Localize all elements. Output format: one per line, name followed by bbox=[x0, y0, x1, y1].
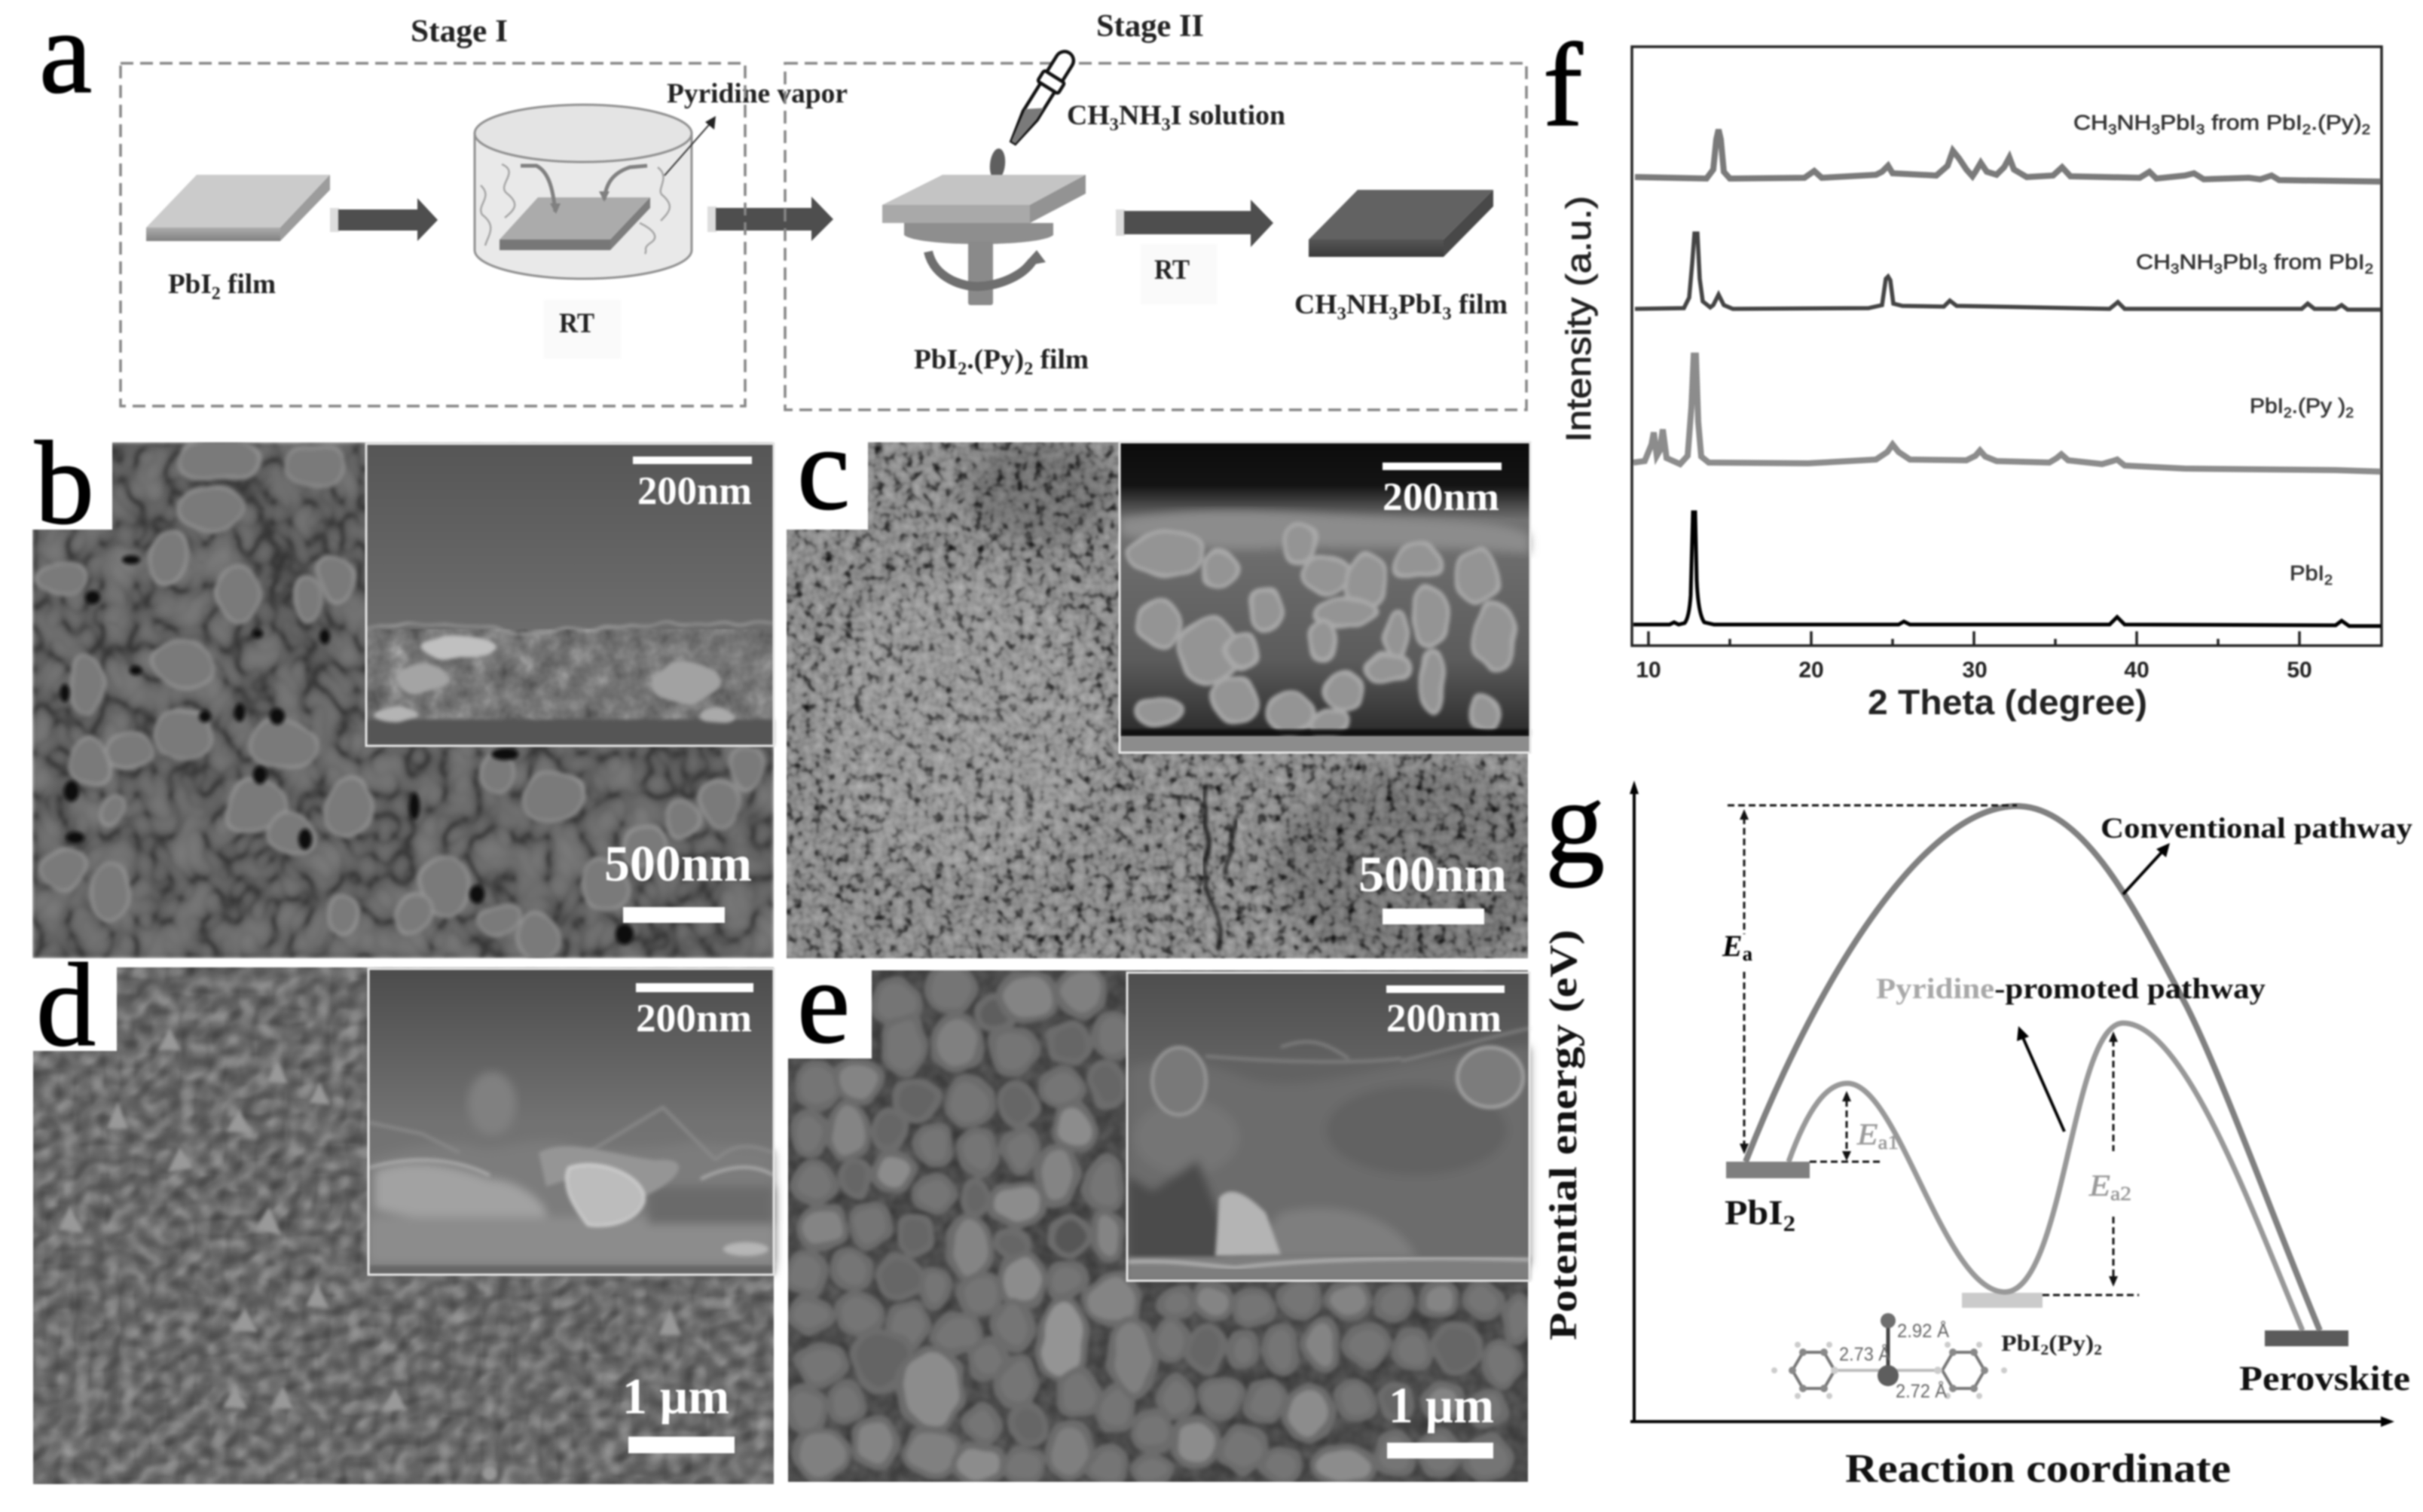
CH3NH3I solution label: I solution bbox=[1171, 100, 1285, 131]
CH3NH3I solution label: 3 bbox=[1162, 115, 1171, 135]
spectrum label top: NH bbox=[2117, 111, 2152, 134]
CH3NH3PbI3 film label: PbI bbox=[1398, 289, 1442, 320]
spectrum label third: .(Py ) bbox=[2292, 394, 2345, 417]
spectrum PbI2-derived perovskite bbox=[1635, 234, 2381, 310]
label tab b bbox=[23, 433, 112, 958]
pyridine vapor label: Pyridine vapor bbox=[667, 78, 848, 109]
inset e bbox=[1127, 973, 1530, 1281]
y axis title: Potential energy (eV) bbox=[1542, 930, 1585, 1340]
CH3NH3I solution label: CH bbox=[1067, 100, 1109, 131]
scale bar 500nm b: 500nm bbox=[604, 835, 752, 892]
PbI2 film label: PbI bbox=[168, 269, 212, 300]
spectrum label top: .(Py) bbox=[2311, 111, 2362, 134]
Stage I heading: Stage I bbox=[411, 14, 508, 49]
y axis title: Intensity (a.u.) bbox=[1559, 196, 1598, 442]
spectrum label top: PbI bbox=[2160, 111, 2196, 134]
spectrum label third: 2 bbox=[2284, 405, 2292, 420]
brightness variation c bbox=[821, 437, 1560, 964]
Ea1 label: a1 bbox=[1878, 1132, 1899, 1153]
panel letter f: f bbox=[1543, 20, 1583, 151]
PbI2.(Py)2 film label: 2 bbox=[958, 359, 967, 379]
pyridine pointer arrow bbox=[2017, 1026, 2064, 1132]
PbI2(Py)2 label: 2 bbox=[2094, 1342, 2102, 1358]
spectrum label second: from PbI bbox=[2267, 250, 2365, 273]
PbI2 label: PbI bbox=[1725, 1193, 1780, 1233]
Perovskite label: Perovskite bbox=[2239, 1359, 2410, 1398]
energy bar PbI2 bbox=[1726, 1162, 1810, 1178]
conventional pathway curve bbox=[1746, 806, 2320, 1330]
inset c bbox=[1120, 442, 1530, 753]
Ea label: a bbox=[1743, 942, 1752, 965]
CH3NH3I solution label: NH bbox=[1119, 100, 1162, 131]
grains b bbox=[38, 439, 762, 961]
spectrum PbI2.(Py)2 bbox=[1633, 356, 2381, 472]
spectrum PbI2(Py)2-derived perovskite bbox=[1635, 130, 2381, 182]
pyridine pathway label: Pyridine -promoted pathway bbox=[1876, 973, 2266, 1005]
spectrum label top: 3 bbox=[2108, 122, 2117, 137]
inset d bbox=[368, 969, 774, 1275]
plot frame and ticks bbox=[1632, 47, 2382, 646]
bond length labels: 2.73 Å bbox=[1839, 1342, 1890, 1365]
RT label bbox=[544, 300, 621, 359]
label tab e bbox=[776, 964, 872, 1058]
PbI2(Py)2 label: PbI bbox=[2001, 1330, 2037, 1356]
x tick labels bbox=[1636, 658, 2312, 683]
x tick labels: 30 bbox=[1962, 658, 1988, 683]
scale bar 200nm d: 200nm bbox=[636, 997, 752, 1040]
x tick labels: 20 bbox=[1798, 658, 1824, 683]
SEM background c bbox=[787, 442, 1528, 958]
Ea dashed guides bbox=[1728, 805, 2139, 1295]
panel a: process schematic bbox=[39, 0, 1526, 410]
Stage II heading: Stage II bbox=[1096, 9, 1204, 44]
panel d: SEM bbox=[23, 939, 774, 1484]
inset b bbox=[366, 444, 774, 746]
spectrum label third: 2 bbox=[2345, 405, 2354, 420]
panel letter c: c bbox=[797, 403, 850, 535]
PbI2.(Py)2 film label: .(Py) bbox=[967, 344, 1024, 375]
vapor chamber cylinder bbox=[475, 105, 692, 279]
CH3NH3PbI3 film label: 3 bbox=[1442, 304, 1452, 324]
spectrum label top: CH bbox=[2073, 111, 2104, 134]
PbI2 film block bbox=[146, 175, 330, 241]
arrow 3 bbox=[1116, 200, 1273, 247]
x axis title: 2 Theta (degree) bbox=[1868, 683, 2147, 722]
CH3NH3PbI3 film label: 3 bbox=[1389, 304, 1398, 324]
scale bar 500nm c: 500nm bbox=[1358, 845, 1507, 903]
bond length labels: 2.92 Å bbox=[1897, 1319, 1949, 1342]
conventional pathway label: Conventional pathway bbox=[2101, 812, 2413, 845]
spectrum PbI2 bbox=[1633, 512, 2381, 626]
x tick labels: 50 bbox=[2287, 658, 2312, 683]
label tab c bbox=[776, 433, 868, 530]
panel g: energy diagram bbox=[1542, 756, 2413, 1491]
panel e: SEM bbox=[776, 936, 1532, 1483]
spectrum label top: 3 bbox=[2152, 122, 2160, 137]
PbI2(Py)2 label: 2 bbox=[2040, 1342, 2049, 1358]
molecule model bbox=[1771, 1313, 2007, 1399]
panel f: XRD chart bbox=[1543, 20, 2382, 722]
Ea2 label: E bbox=[2088, 1168, 2110, 1202]
stage I dashed box bbox=[121, 63, 745, 406]
spectrum label second: 2 bbox=[2365, 261, 2373, 276]
spectrum label fourth: 2 bbox=[2324, 573, 2333, 588]
conventional pointer arrow bbox=[2123, 843, 2170, 894]
spectrum label second: NH bbox=[2179, 250, 2214, 273]
cracks c bbox=[1205, 783, 1236, 951]
x axis title: Reaction coordinate bbox=[1845, 1446, 2231, 1491]
CH3NH3I solution label: 3 bbox=[1110, 115, 1119, 135]
dropper icon bbox=[1003, 47, 1080, 148]
RT label: RT bbox=[559, 308, 594, 339]
scale bar 200nm e: 200nm bbox=[1386, 997, 1502, 1040]
bond length labels bbox=[1839, 1319, 1949, 1402]
PbI2 film label: film bbox=[221, 269, 276, 300]
bond length labels: 2.72 Å bbox=[1896, 1379, 1947, 1402]
scale bar 200nm c: 200nm bbox=[1383, 475, 1499, 519]
label tab d bbox=[23, 961, 117, 1051]
x tick labels: 10 bbox=[1636, 658, 1661, 683]
PbI2.(Py)2 film label: 2 bbox=[1024, 359, 1033, 379]
arrow 1 bbox=[330, 198, 438, 241]
panel c: SEM bbox=[776, 403, 1560, 964]
spectrum label top: 3 bbox=[2196, 122, 2205, 137]
PbI2 label: 2 bbox=[1783, 1210, 1795, 1236]
axes bbox=[1630, 780, 2394, 1427]
CH3NH3PbI3 film label: 3 bbox=[1337, 304, 1346, 324]
panel b: SEM PbI2 bbox=[23, 417, 774, 961]
SEM background b bbox=[32, 442, 774, 958]
perovskite film block bbox=[1309, 190, 1493, 257]
scale bar 1 um d bbox=[622, 1367, 735, 1453]
spectrum label top: 2 bbox=[2302, 122, 2311, 137]
spectrum label top: from PbI bbox=[2205, 111, 2302, 134]
spectrum label top: 2 bbox=[2362, 122, 2370, 137]
spectrum label second: CH bbox=[2136, 250, 2166, 273]
x tick labels: 40 bbox=[2124, 658, 2150, 683]
pyridine vapor pointer bbox=[665, 116, 716, 176]
PbI2(Py)2 label: (Py) bbox=[2049, 1330, 2094, 1356]
spectrum label fourth: PbI bbox=[2290, 561, 2321, 585]
scale bar 200nm b: 200nm bbox=[637, 469, 752, 513]
scale bar 500nm b bbox=[604, 835, 752, 923]
Ea label: E bbox=[1722, 929, 1743, 963]
CH3NH3PbI3 film label: film bbox=[1452, 289, 1508, 320]
scale bar 1 um d: 1 µm bbox=[622, 1367, 729, 1425]
panel letter d: d bbox=[36, 939, 96, 1071]
energy bar perovskite bbox=[2265, 1330, 2348, 1346]
arrow 2 bbox=[707, 197, 833, 241]
PbI2 film label: 2 bbox=[212, 284, 221, 304]
Ea2 label: a2 bbox=[2110, 1183, 2131, 1205]
pyridine pathway curve bbox=[1789, 1023, 2302, 1330]
CH3NH3PbI3 film label: CH bbox=[1294, 289, 1337, 320]
PbI2.(Py)2 film label: film bbox=[1033, 344, 1089, 375]
scale bar 1 um e: 1 µm bbox=[1389, 1376, 1494, 1434]
SEM background e bbox=[788, 970, 1528, 1482]
grains e bbox=[787, 964, 1532, 1483]
pores b bbox=[60, 555, 634, 945]
droplet bbox=[988, 148, 1007, 181]
energy bar PbI2(Py)2 bbox=[1962, 1293, 2043, 1308]
panel letter b: b bbox=[35, 417, 94, 549]
spin coater bbox=[882, 175, 1086, 305]
stage II dashed box bbox=[785, 63, 1526, 410]
PbI2.(Py)2 film label: PbI bbox=[914, 344, 958, 375]
SEM background d bbox=[33, 967, 774, 1484]
Ea1 label: E bbox=[1856, 1117, 1878, 1151]
spectrum label second: 3 bbox=[2171, 261, 2179, 276]
RT label 2 bbox=[1141, 244, 1217, 304]
bright grains d bbox=[59, 1028, 681, 1481]
CH3NH3PbI3 film label: NH bbox=[1346, 289, 1389, 320]
scale bar 1 um e bbox=[1387, 1376, 1494, 1459]
RT label 2: RT bbox=[1154, 255, 1190, 286]
panel letter g: g bbox=[1545, 756, 1605, 888]
spectrum label third: PbI bbox=[2250, 394, 2281, 417]
spectrum label second: 3 bbox=[2259, 261, 2267, 276]
spectrum label second: PbI bbox=[2223, 250, 2259, 273]
spectrum label second: 3 bbox=[2214, 261, 2223, 276]
panel letter e: e bbox=[797, 936, 850, 1068]
Ea arrowheads bbox=[1740, 809, 2118, 1287]
